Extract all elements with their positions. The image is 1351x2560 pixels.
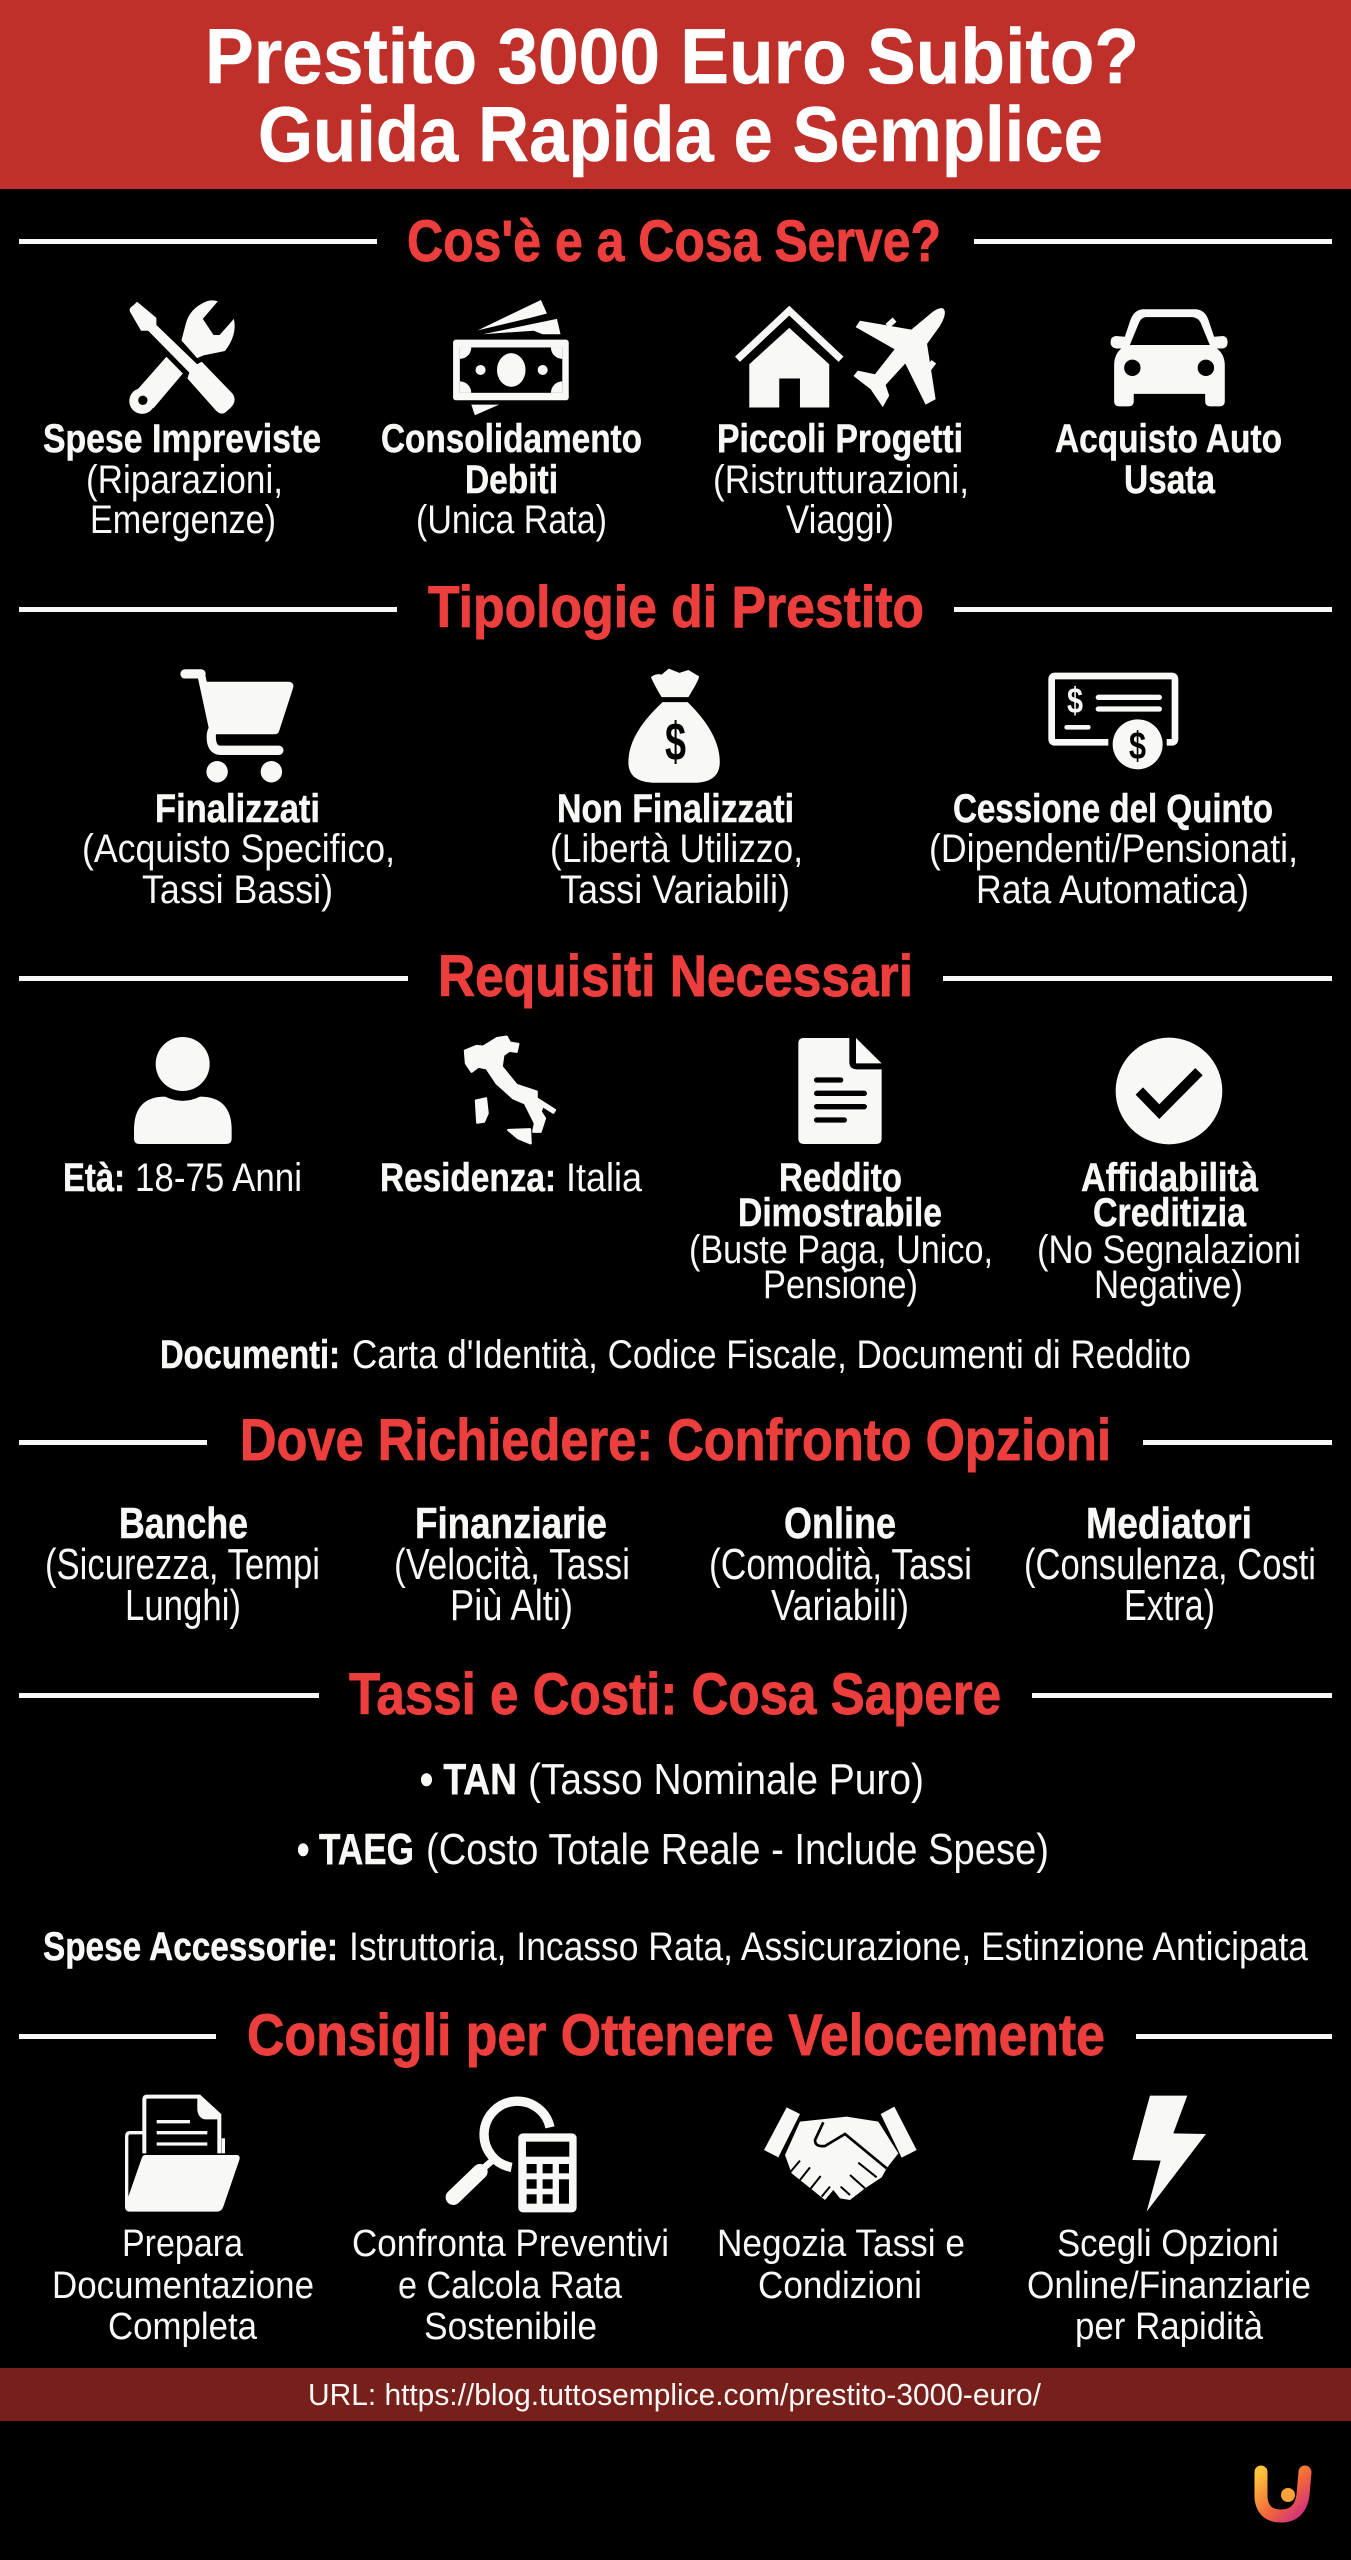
icon: cheque with coin: $: [1067, 680, 1083, 721]
item: finalizzati: Finalizzati: [155, 787, 320, 831]
heading: requisiti necessari: Requisiti Necessari: [438, 944, 913, 1009]
item: non finalizzati: (Libertà Utilizzo,: [550, 827, 803, 871]
item: reddito dimostrabile: Pensione): [763, 1263, 918, 1307]
text: documenti: Carta d'Identità, Codice Fiscale, Documenti di Reddito: [352, 1333, 1191, 1377]
heading: dove richiedere: Dove Richiedere: Confronto Opzioni: [240, 1408, 1111, 1473]
icon: shopping cart: [185, 674, 293, 782]
item: mediatori: [1024, 1499, 1316, 1630]
tip: negozia tassi: [717, 2223, 965, 2307]
footer url bar: URL: https://blog.tuttosemplice.com/prestito-3000-euro/: [308, 2377, 1041, 2412]
bullet: tan: (Tasso Nominale Puro): [528, 1755, 924, 1804]
item: acquisto auto usata: [1055, 417, 1282, 502]
item: spese impreviste: Emergenze): [90, 498, 276, 542]
item: piccoli progetti: (Ristrutturazioni,: [713, 458, 969, 502]
item: banche: Lunghi): [125, 1581, 241, 1630]
item: banche: (Sicurezza, Tempi: [45, 1540, 320, 1589]
tip: negozia tassi: Condizioni: [758, 2265, 922, 2307]
item: online: (Comodità, Tassi: [709, 1540, 972, 1589]
icon: house and airplane: [737, 308, 945, 407]
item: finalizzati: [82, 787, 395, 912]
tip: scegli opzioni: Online/Finanziarie: [1027, 2265, 1311, 2307]
icon: cheque with coin: [1052, 676, 1175, 769]
item: non finalizzati: [550, 787, 803, 912]
item: reddito dimostrabile: [689, 1156, 993, 1307]
item: piccoli progetti: [713, 417, 969, 542]
heading: tassi e costi: Tassi e Costi: Cosa Sapere: [349, 1662, 1001, 1727]
icon: money bag: [628, 669, 720, 783]
tip: prepara documentazione: [52, 2223, 314, 2348]
icon: map of italy: [465, 1037, 555, 1143]
item: consolidamento debiti: Debiti: [465, 458, 558, 502]
item: banche: Banche: [119, 1499, 248, 1548]
tip: prepara documentazione: Prepara: [122, 2223, 244, 2265]
icon: document: [798, 1038, 882, 1144]
title: Guida Rapida e Semplice: [258, 90, 1103, 178]
item: reddito dimostrabile: Dimostrabile: [738, 1191, 942, 1235]
item: acquisto auto usata: Acquisto Auto: [1055, 417, 1282, 461]
item: spese impreviste: (Riparazioni,: [86, 458, 283, 502]
tip: confronta preventivi: [352, 2223, 669, 2348]
tip: scegli opzioni: per Rapidità: [1075, 2306, 1264, 2348]
icon: check mark in circle: [1116, 1038, 1222, 1144]
item: mediatori: Extra): [1124, 1581, 1215, 1630]
item: piccoli progetti: Piccoli Progetti: [717, 417, 963, 461]
item: cessione del quinto: Cessione del Quinto: [953, 787, 1273, 831]
icon: cheque with coin: $: [1129, 725, 1146, 768]
bullet: tan: • TAN: [420, 1755, 517, 1804]
tip: scegli opzioni: [1027, 2223, 1311, 2348]
icon: lightning bolt: [1132, 2096, 1206, 2212]
item: cessione del quinto: Rata Automatica): [976, 868, 1249, 912]
item: online: [709, 1499, 972, 1630]
item: consolidamento debiti: [381, 417, 642, 542]
tip: confronta preventivi: Confronta Preventivi: [352, 2223, 669, 2265]
panel: tipologie di prestito: [82, 575, 1298, 912]
item: piccoli progetti: Viaggi): [786, 498, 894, 542]
item: età: 18-75 Anni: [135, 1156, 302, 1200]
icon: car: [1111, 309, 1228, 406]
item: residenza: Residenza:: [380, 1156, 556, 1200]
tip: scegli opzioni: Scegli Opzioni: [1057, 2223, 1279, 2265]
bullet: taeg: (Costo Totale Reale - Include Spese): [426, 1825, 1049, 1874]
item: finanziarie: [394, 1499, 630, 1630]
item: affidabilità creditizia: Negative): [1094, 1263, 1243, 1307]
panel: requisiti necessari: [63, 944, 1301, 1377]
item: spese impreviste: Spese Impreviste: [43, 417, 321, 461]
item: online: Online: [784, 1499, 896, 1548]
title: Prestito 3000 Euro Subito?: [205, 12, 1139, 100]
bullet: taeg: • TAEG: [297, 1825, 414, 1874]
panel: consigli: [52, 2003, 1311, 2348]
item: cessione del quinto: [929, 787, 1298, 912]
icon: wrench and screwdriver: [129, 300, 235, 414]
item: acquisto auto usata: Usata: [1124, 458, 1216, 502]
text: spese accessorie: Spese Accessorie:: [43, 1925, 338, 1969]
item: consolidamento debiti: Consolidamento: [381, 417, 642, 461]
item: online: Variabili): [771, 1581, 909, 1630]
icon: money bag: $: [665, 712, 686, 772]
tip: prepara documentazione: Documentazione: [52, 2265, 314, 2307]
heading: tipologie di prestito: Tipologie di Prestito: [428, 575, 924, 640]
item: finalizzati: Tassi Bassi): [142, 868, 333, 912]
item: cessione del quinto: (Dipendenti/Pensionati,: [929, 827, 1298, 871]
item: affidabilità creditizia: Affidabilità: [1081, 1156, 1259, 1200]
panel: cos'è e a cosa serve: [43, 209, 1282, 542]
item: finanziarie: Finanziarie: [415, 1499, 607, 1548]
icon: handshake: [764, 2107, 917, 2200]
item: reddito dimostrabile: Reddito: [779, 1156, 902, 1200]
heading: cos'è e a cosa serve: Cos'è e a Cosa Serve?: [407, 209, 941, 274]
title: [205, 12, 1139, 178]
item: reddito dimostrabile: (Buste Paga, Unico,: [689, 1228, 993, 1272]
item: banche: [45, 1499, 320, 1630]
item: età: Età:: [63, 1156, 125, 1200]
item: età: [63, 1156, 302, 1200]
logo: [1261, 2472, 1305, 2516]
item: affidabilità creditizia: [1037, 1156, 1301, 1307]
tip: prepara documentazione: Completa: [108, 2306, 258, 2348]
icon: magnifier and calculator: [453, 2101, 577, 2212]
tip: negozia tassi: Negozia Tassi e: [717, 2223, 965, 2265]
item: affidabilità creditizia: (No Segnalazioni: [1037, 1228, 1301, 1272]
item: residenza: Italia: [566, 1156, 643, 1200]
item: non finalizzati: Non Finalizzati: [557, 787, 794, 831]
icon: person: [134, 1037, 232, 1144]
item: affidabilità creditizia: Creditizia: [1093, 1191, 1247, 1235]
item: consolidamento debiti: (Unica Rata): [416, 498, 607, 542]
item: non finalizzati: Tassi Variabili): [560, 868, 790, 912]
heading: consigli: Consigli per Ottenere Velocemente: [247, 2003, 1105, 2068]
item: finanziarie: (Velocità, Tassi: [394, 1540, 630, 1589]
icon: folder with document: [125, 2097, 240, 2212]
item: mediatori: Mediatori: [1086, 1499, 1252, 1548]
item: finalizzati: (Acquisto Specifico,: [82, 827, 395, 871]
tip: confronta preventivi: Sostenibile: [424, 2306, 597, 2348]
panel: dove richiedere: [45, 1408, 1316, 1630]
footer url bar: [0, 2368, 1351, 2421]
item: spese impreviste: [43, 417, 321, 542]
header banner: [0, 0, 1351, 189]
icon: banknotes: [448, 300, 574, 415]
tip: confronta preventivi: e Calcola Rata: [398, 2265, 623, 2307]
text: documenti: Documenti:: [160, 1333, 340, 1377]
item: finanziarie: Più Alti): [450, 1581, 573, 1630]
panel: tassi e costi: [43, 1662, 1309, 1969]
